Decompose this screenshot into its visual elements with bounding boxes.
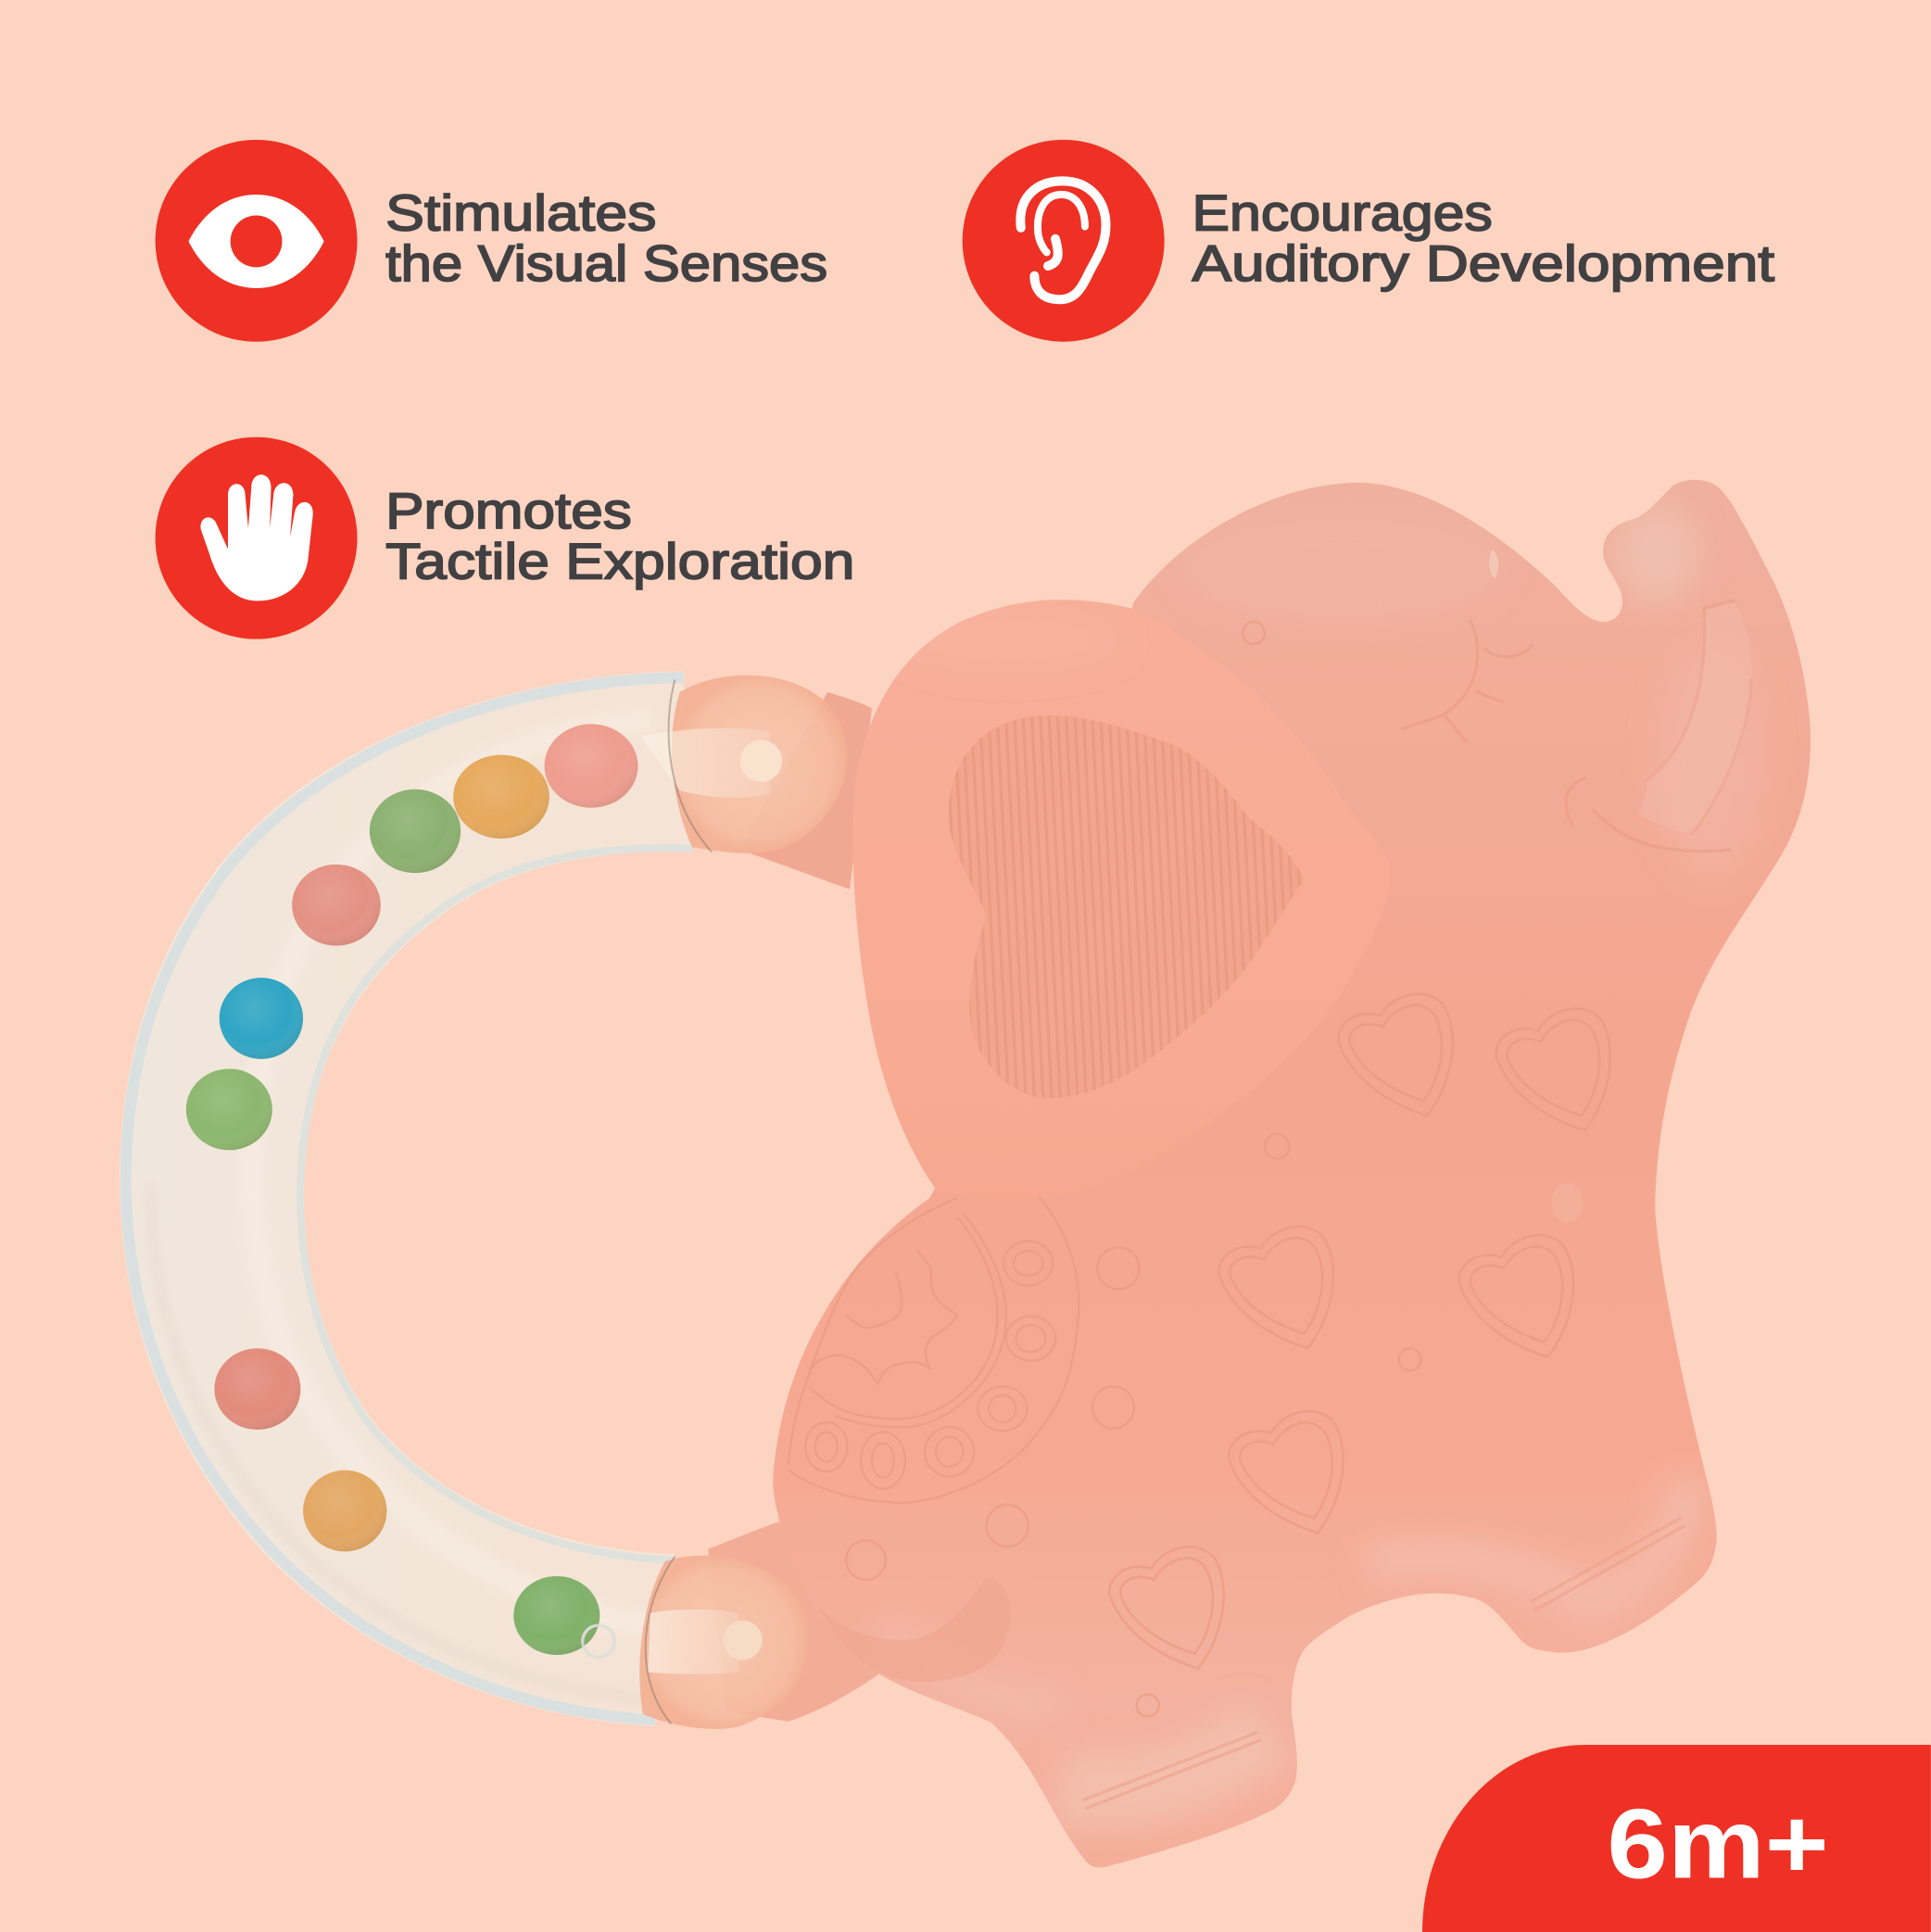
bead: pink <box>545 724 638 808</box>
benefit: tactile exploration <box>156 437 854 639</box>
mouth and tusk <box>819 1577 1011 1682</box>
benefit: stimulates visual senses <box>156 140 827 342</box>
beads <box>186 724 638 1658</box>
bead: green <box>513 1576 599 1655</box>
bead: blue <box>220 978 303 1059</box>
end cap: top <box>640 676 847 853</box>
heart 3 <box>1219 1227 1333 1348</box>
text: stimulates the visual senses: Stimulates <box>385 184 656 241</box>
embossed dots <box>846 622 1584 1716</box>
bead: orange <box>303 1471 386 1551</box>
heart 6 <box>1109 1547 1224 1669</box>
tusk highlight <box>1638 600 1751 834</box>
elephant body <box>773 480 1811 1867</box>
blanket ornament <box>789 1195 1079 1503</box>
bead: green <box>370 789 461 873</box>
icon: hand in red circle <box>156 437 358 639</box>
text: promotes tactile exploration: Promotes <box>385 483 632 539</box>
face details: eye and trunk lines <box>1403 600 1751 852</box>
embossed hearts <box>1109 994 1610 1669</box>
bead: rose <box>292 865 381 946</box>
benefit: auditory development <box>963 140 1774 342</box>
blanket rings <box>805 1242 1055 1489</box>
text: promotes tactile exploration: Tactile Exploration <box>385 534 854 590</box>
nostril highlight <box>1489 549 1498 579</box>
text: encourages auditory development: Auditory Development <box>1193 235 1774 292</box>
heart 2 <box>1496 1009 1610 1130</box>
text: encourages auditory development <box>1193 184 1774 292</box>
text: stimulates the visual senses: the Visual Senses <box>385 235 827 292</box>
handle stems <box>708 692 882 1722</box>
icon: ear in red circle <box>963 140 1165 342</box>
feet lines <box>1082 1517 1685 1809</box>
heart 5 <box>1229 1411 1344 1533</box>
age badge <box>1422 1745 1931 1932</box>
bead: orange <box>453 755 549 839</box>
icon: eye in red circle <box>156 140 358 342</box>
text: encourages auditory development: Encourages <box>1193 184 1493 241</box>
elephant ear <box>853 600 1301 1197</box>
heart 1 <box>1338 994 1453 1116</box>
light patches on the silicone <box>1182 511 1502 622</box>
bead: rose <box>214 1348 300 1430</box>
text: 6m+: 6m+ <box>1607 1789 1829 1900</box>
end cap: bottom <box>639 1556 809 1729</box>
textured heart <box>948 715 1304 1098</box>
bead shading <box>186 724 638 1655</box>
rattle ring <box>120 671 692 1726</box>
text: promotes tactile exploration <box>385 483 854 590</box>
text: stimulates the visual senses <box>385 184 827 292</box>
heart 4 <box>1459 1235 1573 1357</box>
bead: green <box>186 1068 272 1150</box>
product: elephant rattle teether <box>120 480 1811 1867</box>
